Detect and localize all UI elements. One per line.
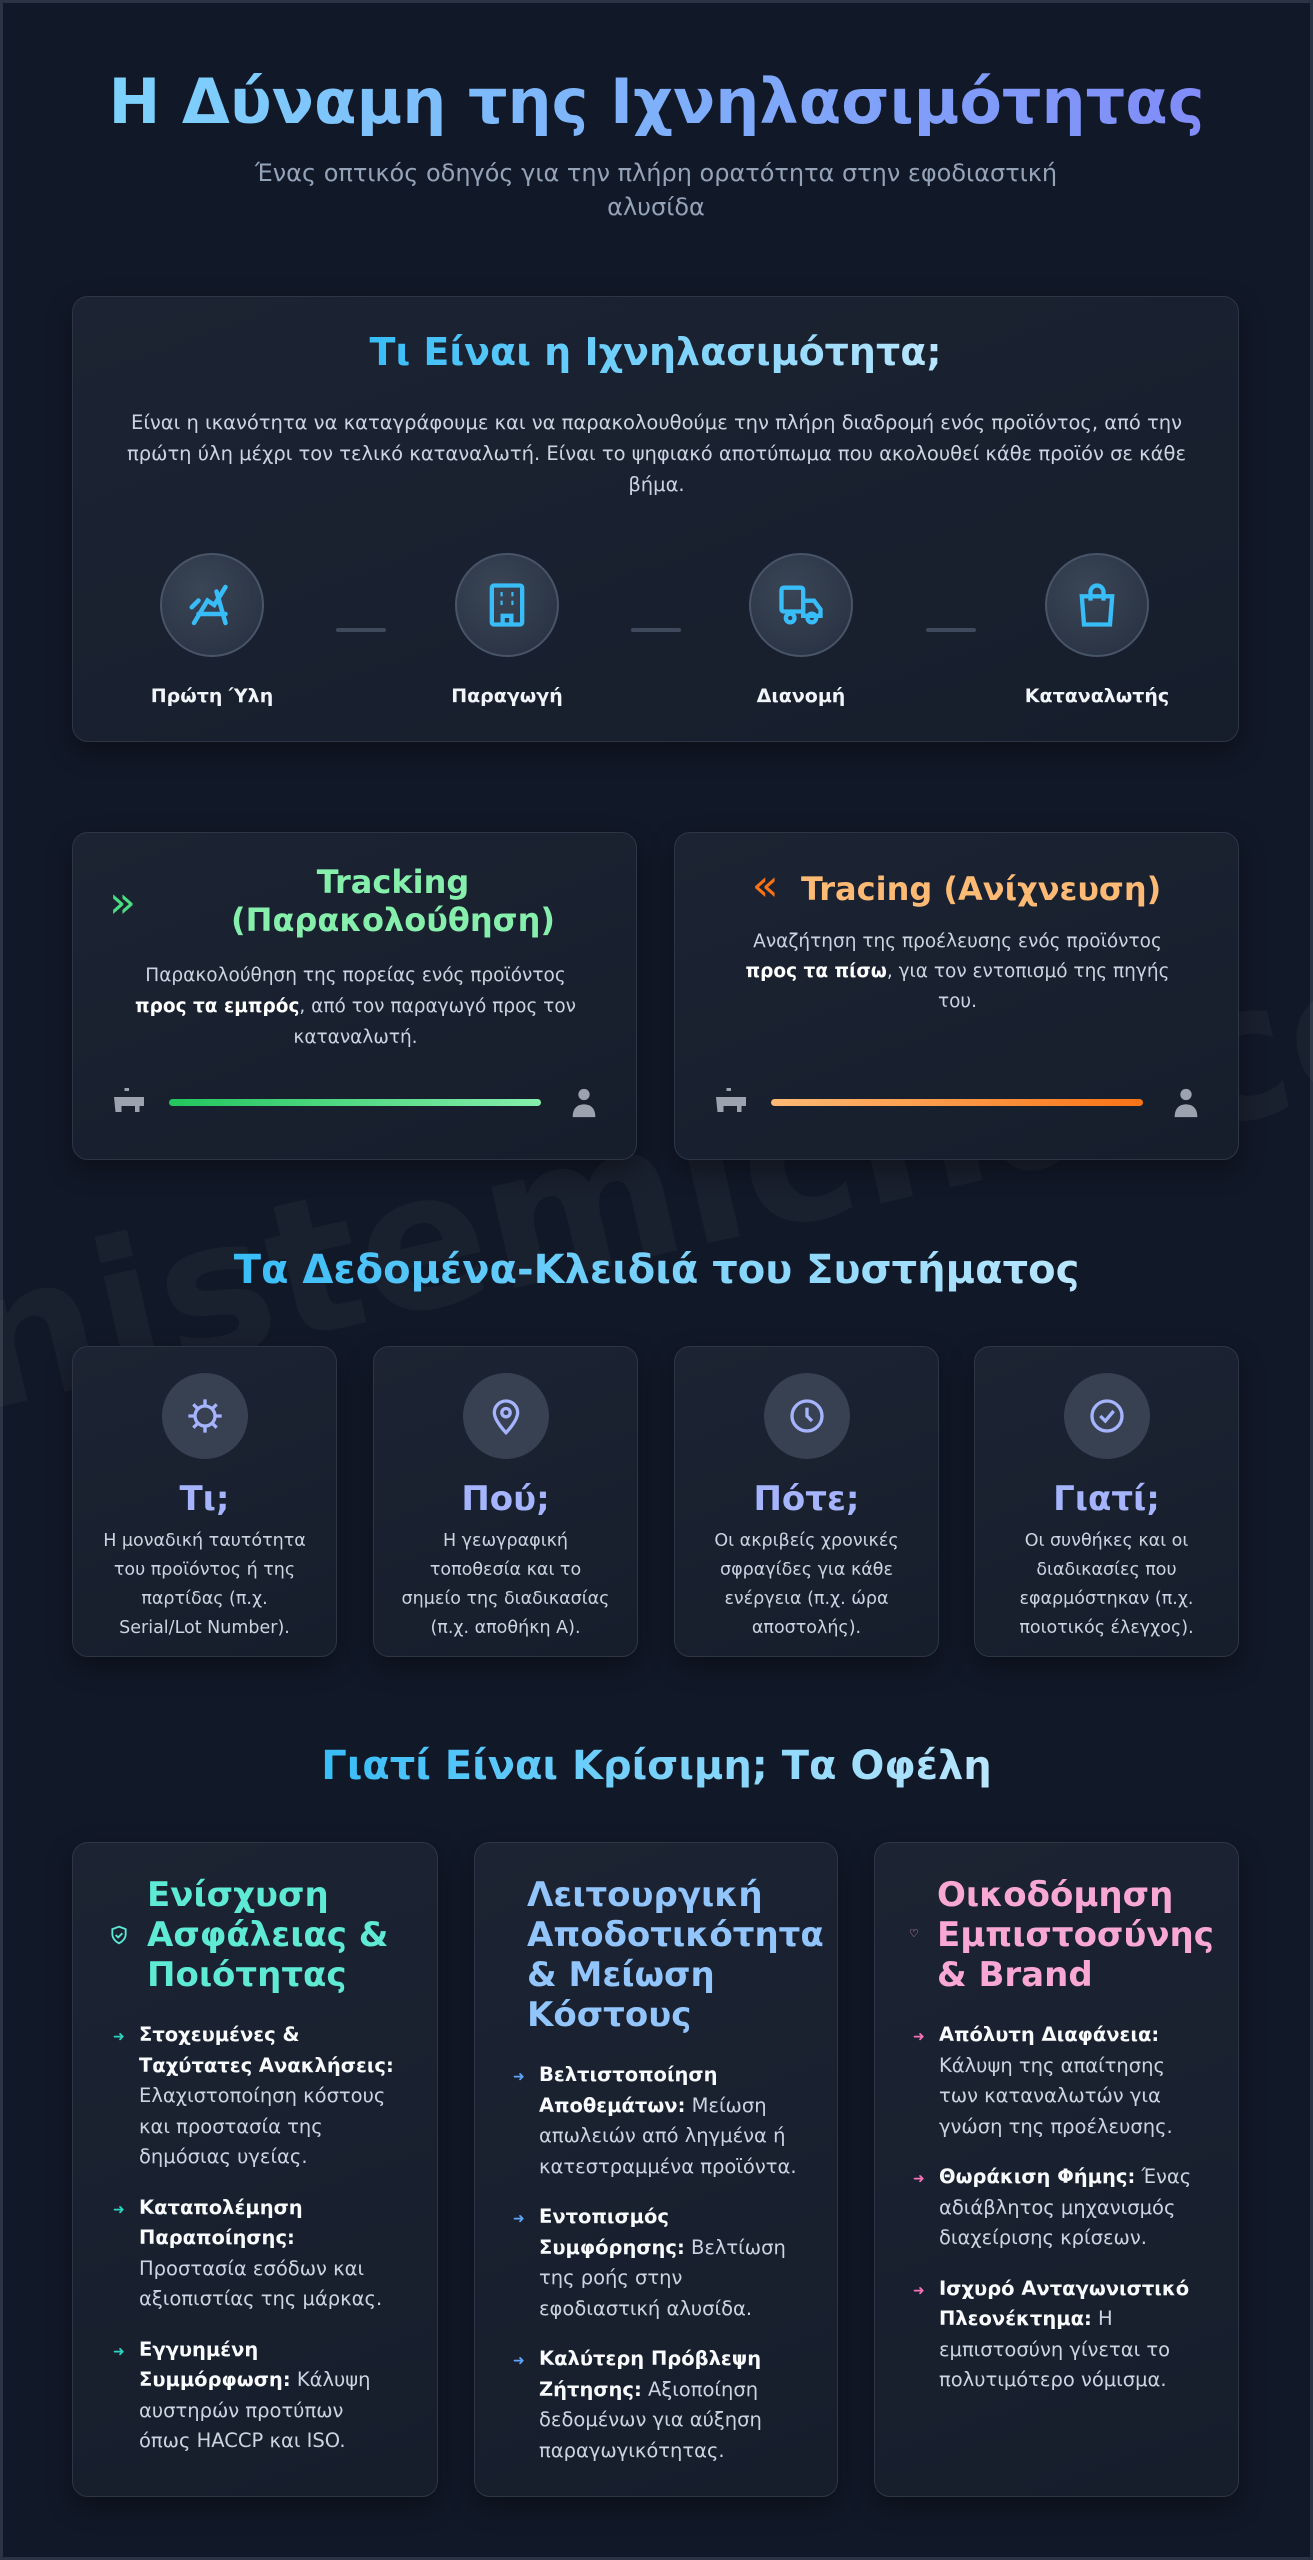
title: & Brand <box>937 1955 1093 1995</box>
icon: forward chevrons: » <box>109 877 136 928</box>
step: distribution <box>749 553 853 707</box>
tracing title with back chevrons: « Tracing (Ανίχνευση) <box>752 860 1161 911</box>
title <box>527 1875 824 2035</box>
icon: building <box>455 553 559 657</box>
icon: shopping bag <box>1045 553 1149 657</box>
icon: raw material <box>160 553 264 657</box>
card: where <box>373 1346 638 1657</box>
title: Ενίσχυση <box>147 1875 329 1915</box>
title: Λειτουργική <box>527 1875 763 1915</box>
card: why: Γιατί; <box>1053 1479 1160 1519</box>
flow bar: factory to consumer <box>114 1088 596 1118</box>
title <box>147 1875 388 1995</box>
heading: key data: Τα Δεδομένα-Κλειδιά του Συστήματος <box>234 1247 1079 1293</box>
icon: chip <box>162 1373 248 1459</box>
card: where: Η γεωγραφική τοποθεσία και το σημείο της διαδικασίας (π.χ. αποθήκη Α). <box>402 1531 609 1638</box>
bullet list: Εγγυημένη Συμμόρφωση: Κάλυψη αυστηρών προτύπων όπως HACCP και ISO. <box>139 2338 371 2452</box>
bullet list <box>114 2023 394 2452</box>
card: what: Τι; <box>179 1479 230 1519</box>
title <box>937 1875 1214 1995</box>
heading: Τι Είναι η Ιχνηλασιμότητα; <box>369 330 942 374</box>
tracking text: Παρακολούθηση της πορείας ενός προϊόντος προς τα εμπρός, από τον παραγωγό προς τον καταναλωτή. <box>135 965 576 1048</box>
tracking title <box>231 863 555 939</box>
card: safety & quality <box>72 1842 438 2497</box>
card: when: Πότε; <box>753 1479 860 1519</box>
bullet list: Στοχευμένες & Ταχύτατες Ανακλήσεις: Ελαχιστοποίηση κόστους και προστασία της δημόσιας υγείας. <box>139 2023 394 2168</box>
bullet list <box>914 2023 1191 2391</box>
bullet list: Θωράκιση Φήμης: Ένας αδιάβλητος μηχανισμός διαχείρισης κρίσεων. <box>939 2165 1191 2249</box>
icon: shield <box>111 1926 127 1944</box>
bullet list: Καταπολέμηση Παραποίησης: Προστασία εσόδων και αξιοπιστίας της μάρκας. <box>139 2196 382 2310</box>
card: when <box>674 1346 939 1657</box>
bullet list <box>514 2063 797 2462</box>
step: consumer <box>1025 553 1169 707</box>
icon: clock <box>764 1373 850 1459</box>
bullet list: Απόλυτη Διαφάνεια: Κάλυψη της απαίτησης των καταναλωτών για γνώση της προέλευσης. <box>939 2023 1173 2138</box>
card: trust & brand <box>874 1842 1239 2497</box>
step: production <box>451 553 563 707</box>
card: why <box>974 1346 1239 1657</box>
bullet list: Βελτιστοποίηση Αποθεμάτων: Μείωση απωλειών από ληγμένα ή κατεστραμμένα προϊόντα. <box>539 2063 797 2178</box>
icon: check circle <box>1064 1373 1150 1459</box>
tracking title: Tracking <box>317 863 469 901</box>
heading: benefits: Γιατί Είναι Κρίσιμη; Τα Οφέλη <box>321 1743 992 1789</box>
card: when: Οι ακριβείς χρονικές σφραγίδες για κάθε ενέργεια (π.χ. ώρα αποστολής). <box>714 1531 899 1638</box>
title: Αποδοτικότητα <box>527 1915 824 1955</box>
tracking title: (Παρακολούθηση) <box>231 901 555 939</box>
bullet list: Ισχυρό Ανταγωνιστικό Πλεονέκτημα: Η εμπιστοσύνη γίνεται το πολυτιμότερο νόμισμα. <box>939 2276 1189 2391</box>
panel: tracking <box>72 832 637 1160</box>
panel: tracing <box>674 832 1239 1160</box>
title: & Μείωση <box>527 1955 715 1995</box>
card: what <box>72 1346 337 1657</box>
step: consumer: Καταναλωτής <box>1025 685 1169 707</box>
bullet list: Εντοπισμός Συμφόρησης: Βελτίωση της ροής στην εφοδιαστική αλυσίδα. <box>539 2205 786 2320</box>
icon: heart: ♡ <box>909 1927 919 1940</box>
step: raw material <box>151 553 273 707</box>
description: Είναι η ικανότητα να καταγράφουμε και να παρακολουθούμε την πλήρη διαδρομή ενός προϊόντος, από την πρώτη ύλη μέχρι τον τελικό καταναλωτή. Είναι το ψηφιακό αποτύπωμα που ακολουθεί κάθε προϊόν σε κάθε βήμα. <box>127 411 1186 496</box>
title: Η Δύναμη της Ιχνηλασιμότητας <box>108 65 1205 138</box>
card: efficiency <box>474 1842 838 2497</box>
icon: location pin <box>462 1373 548 1459</box>
title: Ποιότητας <box>147 1955 347 1995</box>
step: production: Παραγωγή <box>451 685 563 707</box>
title: Εμπιστοσύνης <box>937 1915 1214 1955</box>
card: where: Πού; <box>461 1479 550 1519</box>
step: distribution: Διανομή <box>757 685 845 707</box>
step: raw material: Πρώτη Ύλη <box>151 685 273 707</box>
flow bar <box>716 1088 1198 1118</box>
title: Ασφάλειας & <box>147 1915 388 1955</box>
title: Οικοδόμηση <box>937 1875 1173 1915</box>
panel: what is traceability <box>72 296 1239 742</box>
icon: truck <box>749 553 853 657</box>
card: what: Η μοναδική ταυτότητα του προϊόντος ή της παρτίδας (π.χ. Serial/Lot Number). <box>103 1531 306 1638</box>
tracing text: Αναζήτηση της προέλευσης ενός προϊόντος προς τα πίσω, για τον εντοπισμό της πηγής του. <box>746 931 1169 1012</box>
subtitle: Ένας οπτικός οδηγός για την πλήρη ορατότητα στην εφοδιαστική αλυσίδα <box>255 159 1057 221</box>
bullet list: Καλύτερη Πρόβλεψη Ζήτησης: Αξιοποίηση δεδομένων για αύξηση παραγωγικότητας. <box>539 2347 762 2462</box>
title: Κόστους <box>527 1995 691 2035</box>
card: why: Οι συνθήκες και οι διαδικασίες που εφαρμόστηκαν (π.χ. ποιοτικός έλεγχος). <box>1019 1531 1194 1638</box>
